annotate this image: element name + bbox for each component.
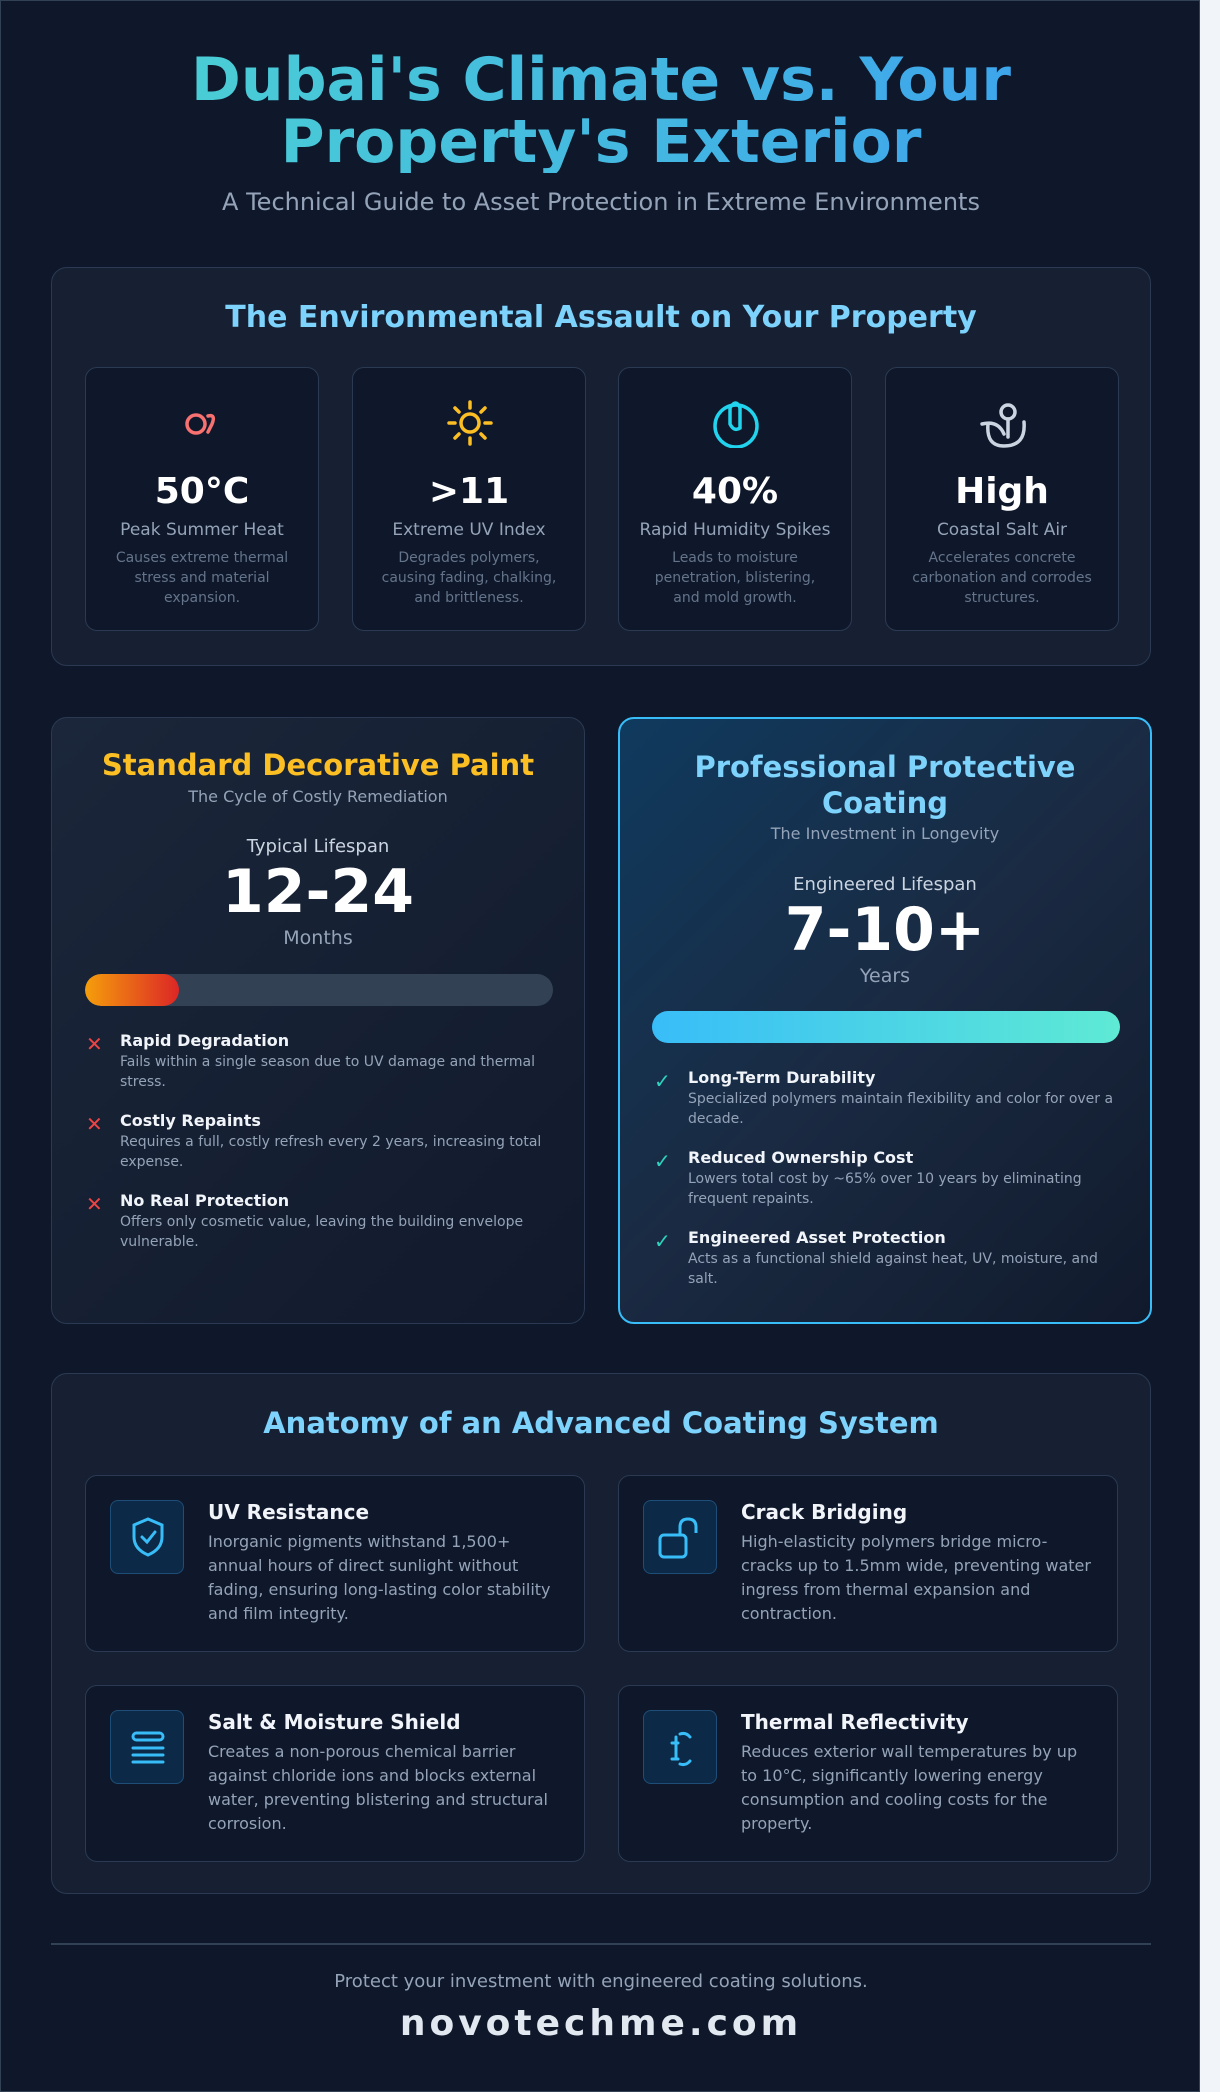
panel: standard paint — [51, 717, 585, 1324]
subheading: The Cycle of Costly Remediation — [188, 787, 448, 806]
title: Property's Exterior — [281, 107, 921, 177]
item: Costly Repaints — [120, 1111, 261, 1130]
item: Fails within a single season due to UV damage and thermal stress. — [120, 1054, 535, 1090]
item: ✕ — [86, 1192, 103, 1216]
lifespan stat: 12-24 — [222, 857, 414, 927]
item: Long-Term Durability — [688, 1068, 875, 1087]
stat: heat: Causes extreme thermal stress and material expansion. — [116, 550, 288, 606]
feature: crack — [618, 1475, 1118, 1652]
feature: thermal: consumption and cooling costs for the — [741, 1790, 1047, 1809]
stat: uv: >11 — [429, 471, 509, 512]
subheading: The Investment in Longevity — [771, 824, 999, 843]
heading: Anatomy of an Advanced Coating System — [263, 1406, 939, 1440]
icon: thermal — [643, 1710, 717, 1784]
item: Acts as a functional shield against heat, UV, moisture, and salt. — [688, 1251, 1098, 1287]
item: ✕ — [86, 1112, 103, 1136]
stat: humidity: 40% — [692, 471, 778, 512]
heading: Professional Protective — [694, 750, 1075, 784]
feature: thermal: Thermal Reflectivity — [741, 1710, 969, 1734]
item: Specialized polymers maintain flexibility and color for over a decade. — [688, 1091, 1113, 1127]
progress bar — [85, 974, 553, 1006]
stat: heat — [85, 367, 319, 631]
lifespan stat: Typical Lifespan — [247, 836, 389, 857]
feature: UV — [85, 1475, 585, 1652]
lifespan stat: Months — [283, 927, 353, 949]
title — [1, 49, 1201, 173]
item: No Real Protection — [120, 1191, 289, 1210]
feature: crack: contraction. — [741, 1604, 837, 1623]
icon: salt air — [980, 403, 1026, 448]
item: ✓ — [654, 1229, 671, 1253]
item — [86, 1031, 535, 1090]
stat: uv: Degrades polymers, causing fading, chalking, and brittleness. — [382, 550, 556, 606]
panel: professional coating — [618, 717, 1152, 1324]
feature: UV: Inorganic pigments withstand 1,500+ annual hours of direct sunlight without fading, ensuring long-lasting color stability and film integrity. — [208, 1532, 550, 1623]
heading: Standard Decorative Paint — [102, 748, 534, 782]
progress bar — [652, 1011, 1120, 1043]
panel heading: The Environmental Assault on Your Property — [225, 300, 977, 335]
stat: heat: 50°C — [155, 471, 249, 512]
item: Requires a full, costly refresh every 2 years, increasing total expense. — [120, 1134, 541, 1170]
item — [654, 1068, 1113, 1127]
feature: UV: UV Resistance — [208, 1500, 369, 1524]
feature: salt: Salt & Moisture Shield — [208, 1710, 461, 1734]
icon: sun — [447, 400, 493, 446]
lifespan stat: Years — [860, 965, 910, 987]
item: ✓ — [654, 1069, 671, 1093]
icon: humidity — [713, 401, 759, 448]
footer text: Protect your investment with engineered coating solutions. — [334, 1971, 868, 1992]
item: Rapid Degradation — [120, 1031, 289, 1050]
icon: layers — [110, 1710, 184, 1784]
feature: crack: ingress from thermal expansion and — [741, 1580, 1030, 1599]
feature: thermal: to 10°C, significantly lowering energy — [741, 1766, 1043, 1785]
item — [86, 1191, 523, 1250]
stat: salt: High — [955, 471, 1049, 512]
lifespan stat: Engineered Lifespan — [793, 874, 977, 895]
panel: environmental assault — [51, 267, 1151, 666]
item: ✕ — [86, 1032, 103, 1056]
lifespan stat — [222, 836, 414, 949]
stat: humidity: Rapid Humidity Spikes — [640, 520, 830, 540]
feature: salt — [85, 1685, 585, 1862]
item: Offers only cosmetic value, leaving the building envelope vulnerable. — [120, 1214, 523, 1250]
item: Lowers total cost by ~65% over 10 years by eliminating frequent repaints. — [688, 1171, 1082, 1207]
item: Engineered Asset Protection — [688, 1228, 946, 1247]
stat: salt: Accelerates concrete carbonation and corrodes structures. — [912, 550, 1092, 606]
feature: crack: Crack Bridging — [741, 1500, 907, 1524]
icon: heat — [185, 413, 216, 435]
feature: thermal: Reduces exterior wall temperatures by up — [741, 1742, 1077, 1761]
panel: anatomy — [51, 1373, 1151, 1894]
item — [86, 1111, 541, 1170]
stat: humidity — [618, 367, 852, 631]
feature: thermal — [618, 1685, 1118, 1862]
icon: shield — [110, 1500, 184, 1574]
heading — [694, 750, 1075, 820]
feature: thermal: property. — [741, 1814, 812, 1833]
stat: salt — [885, 367, 1119, 631]
subtitle: A Technical Guide to Asset Protection in Extreme Environments — [222, 188, 980, 216]
stat: heat: Peak Summer Heat — [120, 520, 284, 540]
item — [654, 1148, 1082, 1207]
stat: uv: Extreme UV Index — [392, 520, 546, 540]
icon: lock — [643, 1500, 717, 1574]
stat: salt: Coastal Salt Air — [937, 520, 1067, 540]
feature: crack: cracks up to 1.5mm wide, preventing water — [741, 1556, 1091, 1575]
item — [654, 1228, 1098, 1287]
footer url: novotechme.com — [400, 2003, 802, 2044]
stat: uv — [352, 367, 586, 631]
lifespan stat: 7-10+ — [785, 895, 985, 965]
lifespan stat — [785, 874, 985, 987]
stat: humidity: Leads to moisture penetration, blistering, and mold growth. — [655, 550, 815, 606]
feature: crack: High-elasticity polymers bridge micro- — [741, 1532, 1047, 1551]
item: ✓ — [654, 1149, 671, 1173]
feature: salt: Creates a non-porous chemical barrier against chloride ions and blocks external water, preventing blistering and structural corrosion. — [208, 1742, 548, 1833]
item: Reduced Ownership Cost — [688, 1148, 913, 1167]
heading: Coating — [822, 786, 948, 820]
title: Dubai's Climate vs. Your — [191, 45, 1011, 115]
